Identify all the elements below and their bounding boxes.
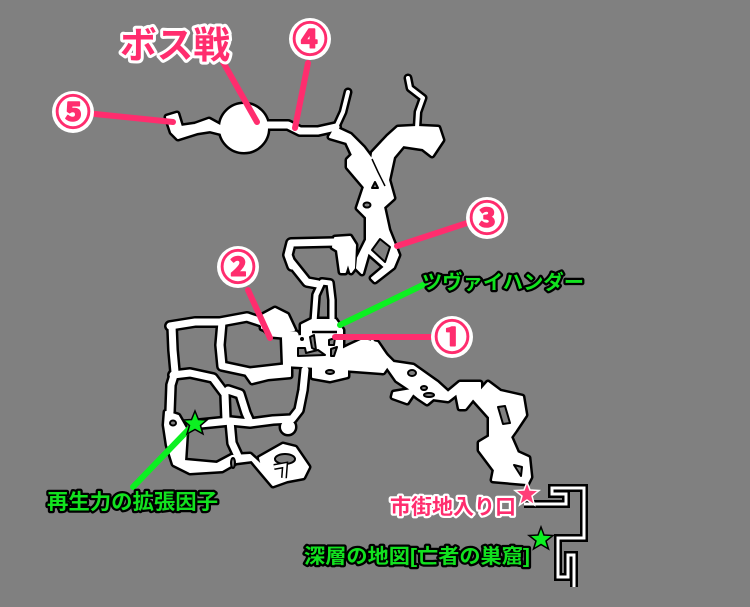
- marker 1: ①: [434, 319, 470, 358]
- green leader lines: [133, 284, 425, 487]
- label: Zweihander: ツヴァイハンダー: [422, 270, 584, 294]
- heading: boss battle: ボス戦: [120, 25, 230, 66]
- marker 2: ②: [220, 249, 256, 288]
- lower maze passage: [524, 488, 584, 587]
- icon: pink star, city entrance: [515, 482, 539, 505]
- label: city entrance: 市街地入り口: [390, 496, 516, 519]
- marker 3: ③: [469, 200, 505, 239]
- marker 4: ④: [292, 21, 328, 60]
- icon: green star, deep map: [529, 527, 553, 549]
- label: deep layer map: 深層の地図[亡者の巣窟]: [304, 545, 530, 568]
- label: regeneration expansion factor: 再生力の拡張因子: [47, 491, 218, 514]
- marker 5: ⑤: [55, 94, 91, 133]
- cave map: [165, 78, 530, 485]
- pink leader lines: [95, 62, 467, 338]
- icon: green star, regeneration factor: [183, 411, 207, 434]
